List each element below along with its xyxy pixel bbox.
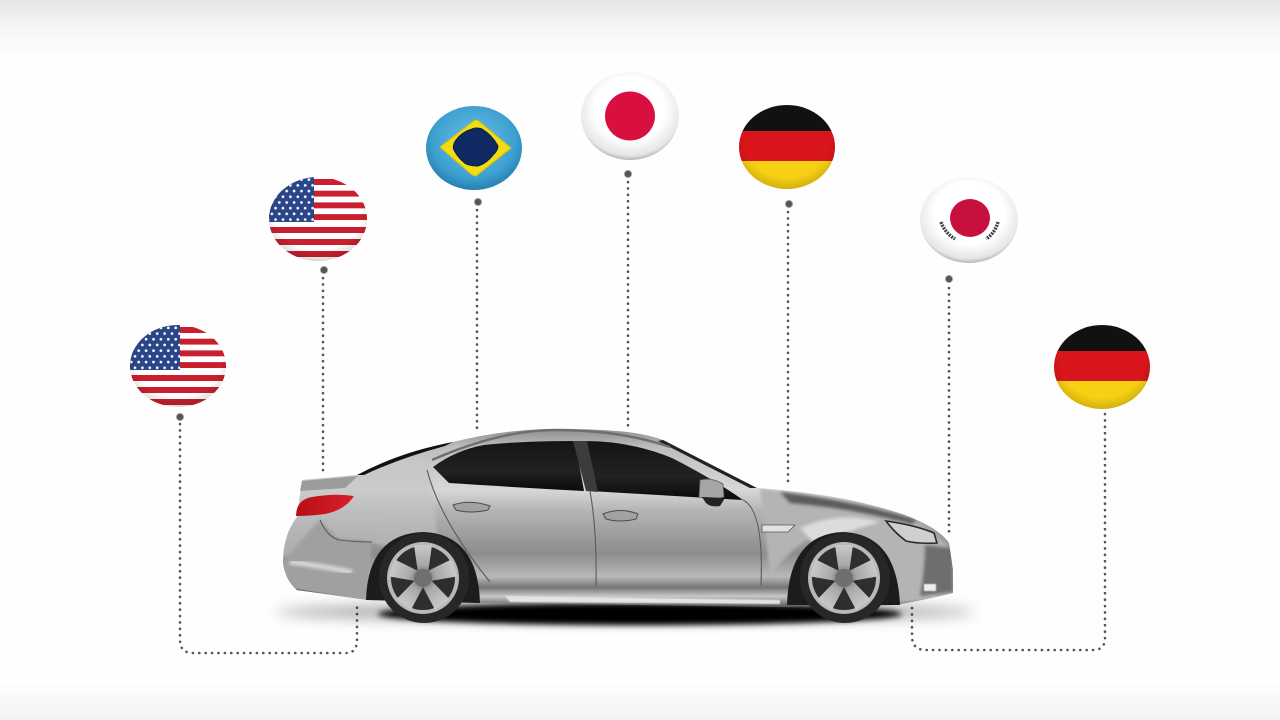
connector end dots [176, 170, 953, 421]
rear wheel [366, 532, 480, 623]
flag: Japan top [581, 72, 679, 160]
car body [270, 429, 953, 607]
flag: Germany right [1054, 325, 1150, 409]
flag: Japan with emblem [920, 177, 1018, 263]
dotted connector lines [180, 182, 1105, 653]
flag: USA left [130, 325, 226, 407]
roof dark edge [357, 442, 453, 475]
headlight [886, 521, 937, 543]
flag: USA upper [269, 177, 367, 261]
side mirror [699, 479, 725, 506]
car [270, 429, 975, 625]
tail light [296, 495, 354, 516]
front wheel [787, 532, 900, 623]
rear trim [300, 476, 358, 491]
door handles [453, 502, 638, 521]
flag: Brazil-style blue [426, 106, 522, 190]
door seams [320, 470, 761, 586]
car ground shadow [275, 603, 975, 625]
flag: Germany top [739, 105, 835, 189]
fender vent [762, 525, 795, 532]
car windows [433, 441, 743, 500]
